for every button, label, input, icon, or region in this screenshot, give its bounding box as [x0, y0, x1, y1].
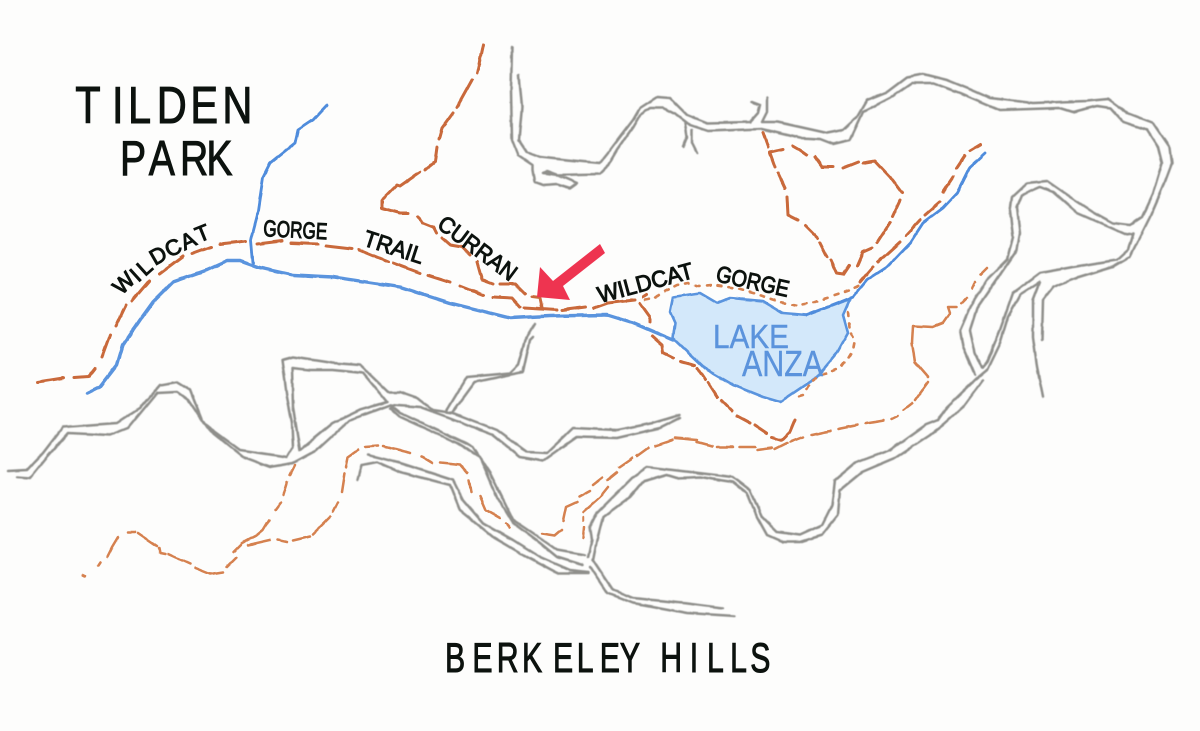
label: Lake Anza: ANZA [742, 343, 823, 384]
roads [8, 47, 1172, 616]
stream: north tributary [251, 105, 327, 263]
stream: east branch [807, 153, 985, 315]
road: north spur [447, 324, 535, 412]
title: Tilden Park: PARK [120, 132, 233, 186]
title: Tilden Park [75, 76, 252, 186]
label: Wildcat Gorge east: WILDCAT [595, 257, 696, 308]
road: northern road to the east loop [511, 47, 1172, 375]
trail: dotted lakeside path north [645, 283, 860, 306]
label: Wildcat Gorge Trail west: WILDCAT [107, 219, 213, 299]
label: Wildcat Gorge east [595, 257, 792, 308]
title: Tilden Park: TILDEN [75, 76, 252, 134]
trails [38, 45, 987, 576]
label: Wildcat Gorge Trail west: TRAIL [360, 225, 428, 269]
trail: wildcat gorge east [860, 145, 980, 282]
trail: upper east loop [763, 133, 902, 274]
label: Wildcat Gorge east: GORGE [714, 260, 792, 302]
trail: southwest hillside trail [83, 446, 510, 576]
road: inner east loop [938, 187, 1133, 425]
trail: eastern hillside trail [542, 268, 987, 538]
streams [88, 105, 985, 393]
label: Curran: CURRAN [433, 210, 522, 286]
road: west road [8, 357, 680, 478]
label: Berkeley Hills: BERKELEY HILLS [445, 634, 770, 681]
lake anza water body [670, 293, 850, 402]
road: southern east-west road [588, 420, 943, 616]
trail: dotted lakeside path east [793, 312, 855, 398]
trail: curran trail [382, 45, 542, 308]
label: Wildcat Gorge Trail west: GORGE [263, 215, 328, 244]
label: Wildcat Gorge Trail west [107, 215, 428, 299]
trail: south lake loop [640, 303, 795, 440]
label: Lake Anza: LAKE [713, 318, 789, 355]
stream: wildcat creek [88, 261, 673, 393]
road: middle and lower roads to the junction [358, 405, 588, 573]
trail: wildcat gorge trail [38, 241, 646, 382]
red arrow [537, 244, 605, 300]
label: Lake Anza [713, 318, 823, 384]
